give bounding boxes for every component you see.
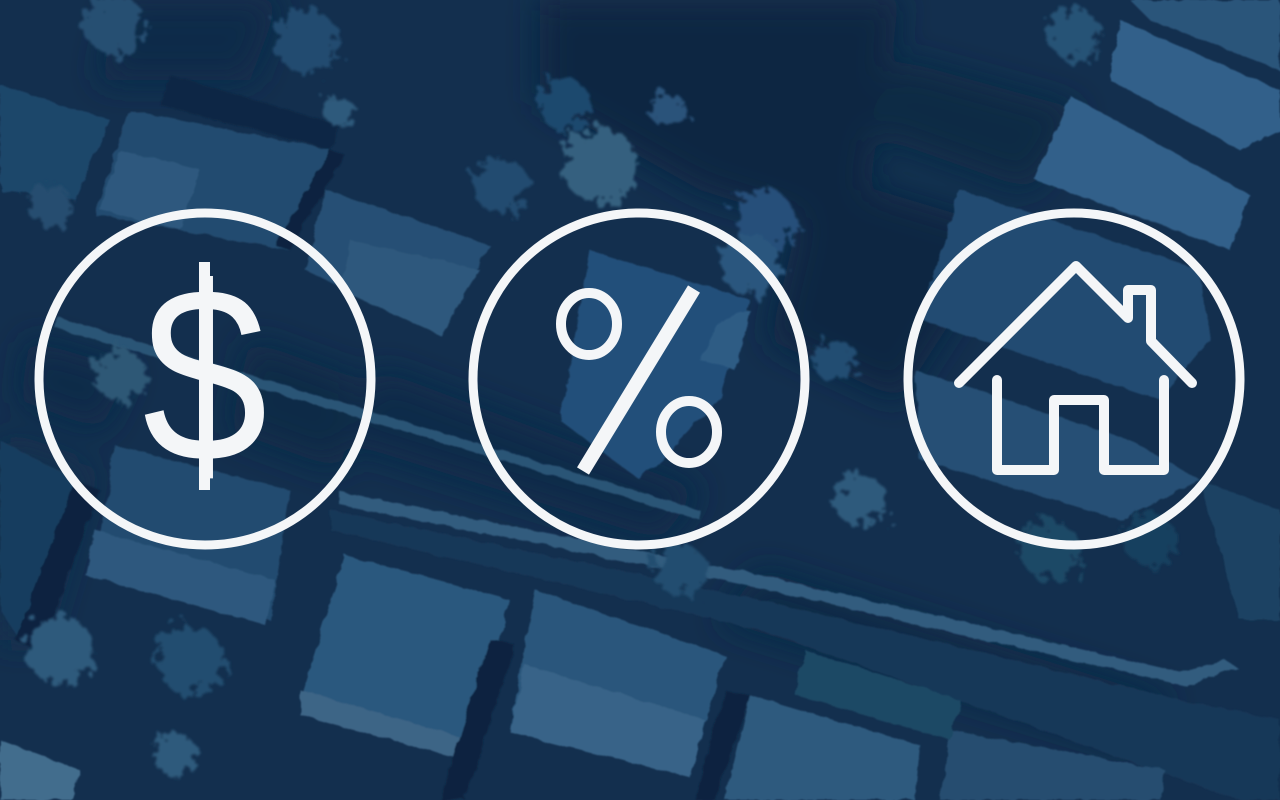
icon: house in circle xyxy=(908,213,1240,545)
dollar vertical bar xyxy=(199,262,210,490)
dark gaps xyxy=(440,640,515,800)
right yard xyxy=(915,370,1200,520)
trees xyxy=(562,127,638,203)
dollar glyph: $ xyxy=(142,236,268,515)
lower left houses xyxy=(95,445,290,620)
centre house xyxy=(560,250,750,480)
icon: dollar sign in circle xyxy=(39,213,371,545)
street strip xyxy=(55,318,700,520)
upper right houses xyxy=(1035,95,1250,250)
house outline xyxy=(959,266,1192,470)
upper left houses xyxy=(0,85,110,200)
icon: percent sign in circle xyxy=(473,213,805,545)
percent glyph xyxy=(561,289,717,471)
